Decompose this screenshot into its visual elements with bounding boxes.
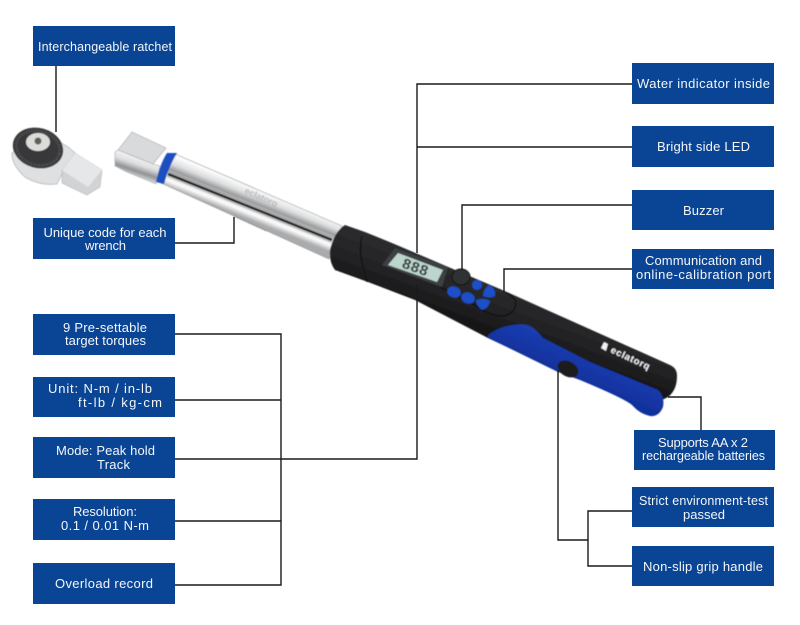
wrench LCD xyxy=(388,253,443,282)
ratchet square drive xyxy=(62,153,102,195)
wrench square head xyxy=(115,132,166,184)
wrench tube shadow line xyxy=(168,174,332,240)
label: pre-settable torques xyxy=(33,314,175,355)
label: interchangeable ratchet xyxy=(33,26,175,66)
label: environment test: Strict environment-test xyxy=(639,494,769,508)
label: resolution: Resolution: xyxy=(73,504,137,519)
ratchet dark ring xyxy=(8,122,68,174)
leader line: unique code xyxy=(175,217,234,243)
label: communication port: online-calibration port xyxy=(636,267,771,282)
wrench tube logo: eclatorq xyxy=(243,186,279,209)
label: water indicator: Water indicator inside xyxy=(637,76,770,91)
leader line: mode xyxy=(175,285,417,459)
wrench buzzer grille xyxy=(452,269,470,285)
wrench display bezel xyxy=(382,248,448,287)
wrench buttons xyxy=(446,280,495,310)
wrench brand logo mark xyxy=(601,342,608,351)
label: batteries: rechargeable batteries xyxy=(642,449,765,463)
leader lines: water indicator and LED xyxy=(417,84,632,253)
label: batteries xyxy=(634,430,775,470)
label: water indicator xyxy=(632,63,774,104)
label: interchangeable ratchet: Interchangeable ratchet xyxy=(38,40,173,54)
wrench chrome tube xyxy=(161,154,342,259)
label: grip handle xyxy=(632,546,774,586)
wrench button panel outline xyxy=(440,287,516,316)
label: mode: Mode: Peak hold xyxy=(56,443,155,458)
leader line: buzzer xyxy=(462,205,632,270)
label: environment test: passed xyxy=(683,507,725,522)
wrench grip panel fold xyxy=(360,236,367,282)
leader line: batteries xyxy=(668,397,701,430)
wrench grip thumb stud xyxy=(555,357,581,381)
wrench blue handle xyxy=(488,324,663,416)
label: mode xyxy=(33,437,175,478)
wrench LCD digits: 888 xyxy=(399,256,430,281)
label: communication port xyxy=(632,249,774,289)
leader line: ratchet xyxy=(55,66,57,132)
wrench black grip xyxy=(330,225,677,402)
label: units: ft-lb / kg-cm xyxy=(78,395,162,410)
label: batteries: Supports AA x 2 xyxy=(658,435,748,450)
label: communication port: Communication and xyxy=(645,253,762,268)
label: environment test xyxy=(632,487,774,527)
wrench serial code xyxy=(234,216,267,231)
wrench brand label: eclatorq xyxy=(609,345,652,373)
label: overload record: Overload record xyxy=(55,576,153,591)
label: units: Unit: N-m / in-lb xyxy=(48,381,152,396)
label: overload record xyxy=(33,563,175,604)
label: grip handle: Non-slip grip handle xyxy=(643,559,763,574)
ratchet silver body xyxy=(12,130,75,184)
label: side LED: Bright side LED xyxy=(657,139,750,154)
label: buzzer xyxy=(632,190,774,230)
label: resolution xyxy=(33,499,175,540)
label: unique code: wrench xyxy=(84,238,126,253)
label: units xyxy=(33,377,175,417)
leader lines: grip and environment test xyxy=(558,370,632,566)
ratchet attachment xyxy=(8,122,102,195)
label: unique code xyxy=(33,218,175,259)
label: mode: Track xyxy=(97,457,130,472)
wrench blue band xyxy=(156,153,177,184)
leader lines: left group xyxy=(175,334,281,585)
wrench tube shadow halo xyxy=(168,174,332,240)
leader line: communication port xyxy=(504,269,632,293)
label: pre-settable torques: 9 Pre-settable xyxy=(63,320,147,335)
label: unique code: Unique code for each xyxy=(44,225,166,240)
label: buzzer: Buzzer xyxy=(683,203,725,218)
torque wrench xyxy=(115,132,677,416)
label: pre-settable torques: target torques xyxy=(65,333,146,348)
ratchet centre cap xyxy=(26,133,50,151)
label: resolution: 0.1 / 0.01 N-m xyxy=(61,518,149,533)
label: side LED xyxy=(632,126,774,167)
